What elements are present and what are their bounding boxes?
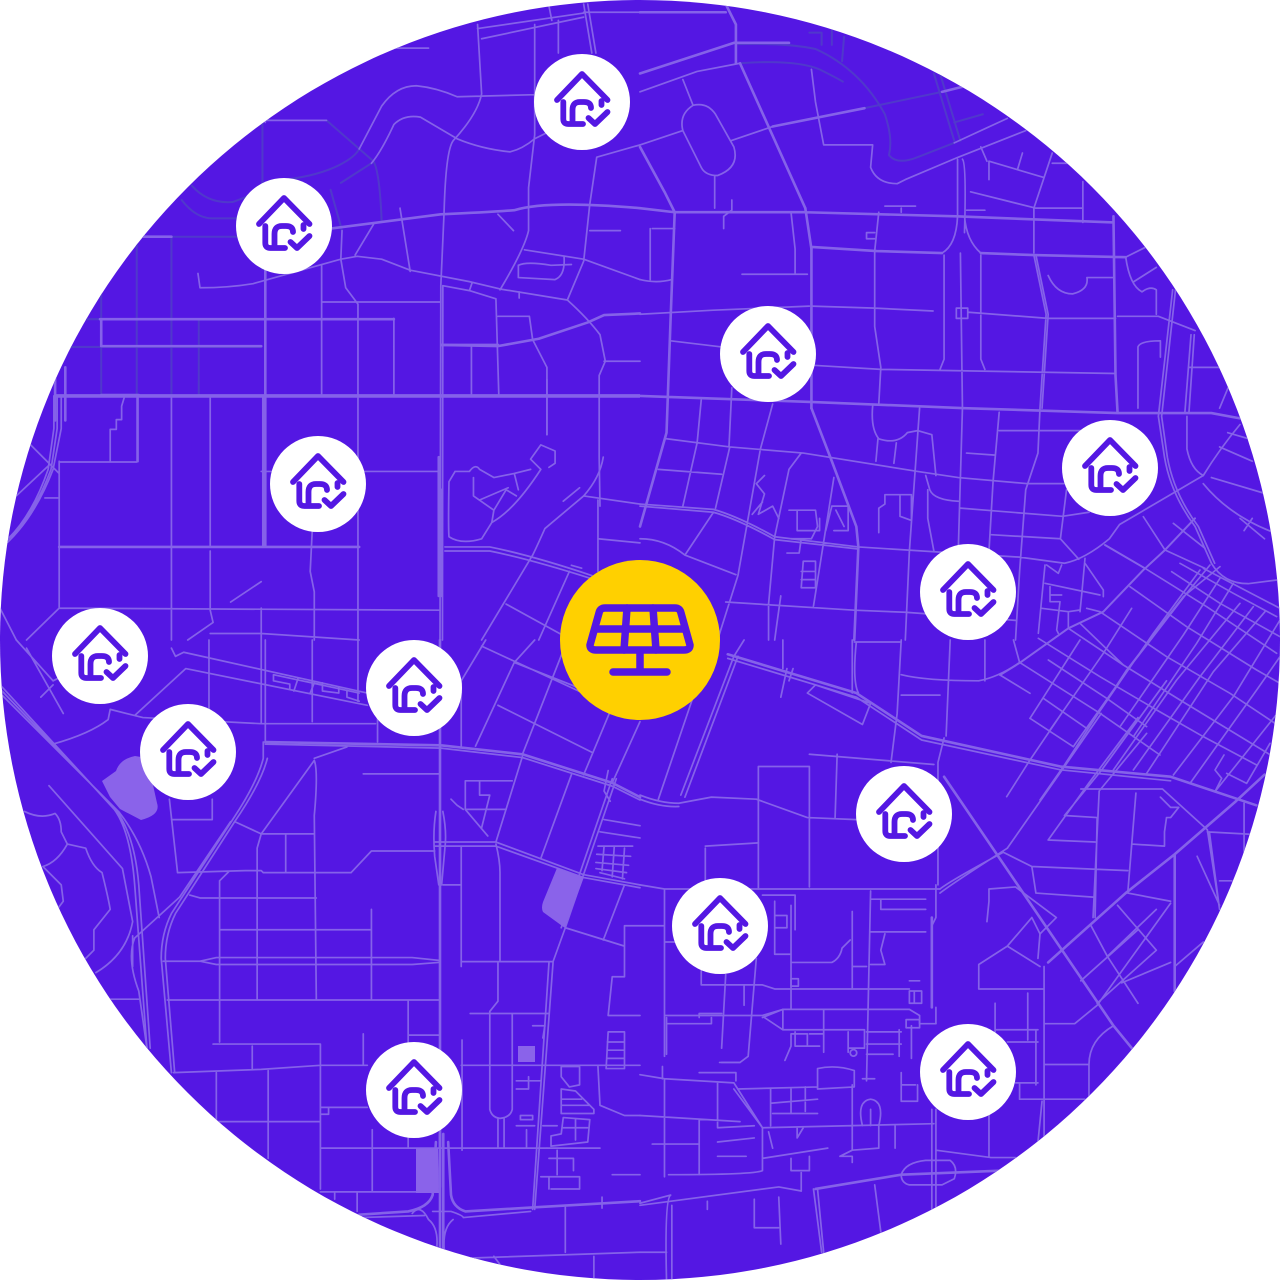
home marker: south-west lake bbox=[140, 704, 236, 800]
top-left quadrant streets bbox=[0, 4, 640, 640]
icon: solar panel bbox=[590, 608, 690, 672]
home marker: inner west bbox=[366, 640, 462, 736]
central solar panel marker bbox=[560, 560, 720, 720]
bottom-left quadrant streets bbox=[2, 640, 640, 1280]
home marker: far west bbox=[52, 608, 148, 704]
home marker: north-centre bbox=[720, 306, 816, 402]
home marker: east bbox=[1062, 420, 1158, 516]
home marker: west-centre bbox=[270, 436, 366, 532]
home marker: south-east bbox=[856, 766, 952, 862]
dense street grid, east side bbox=[1000, 517, 1280, 800]
square block bbox=[518, 1046, 535, 1062]
yellow disc bbox=[560, 560, 720, 720]
bottom-right quadrant streets bbox=[640, 640, 1280, 1280]
water and park areas bbox=[102, 756, 584, 1193]
park bbox=[542, 868, 584, 928]
home marker: north bbox=[534, 54, 630, 150]
home marker: south-west bbox=[366, 1042, 462, 1138]
lake bbox=[102, 756, 158, 820]
block bbox=[416, 1148, 439, 1193]
top-right quadrant streets bbox=[640, 4, 1280, 640]
home marker: far south-east bbox=[920, 1024, 1016, 1120]
home marker: north-west bbox=[236, 178, 332, 274]
home marker: south-centre bbox=[672, 878, 768, 974]
home marker: east-centre bbox=[920, 544, 1016, 640]
